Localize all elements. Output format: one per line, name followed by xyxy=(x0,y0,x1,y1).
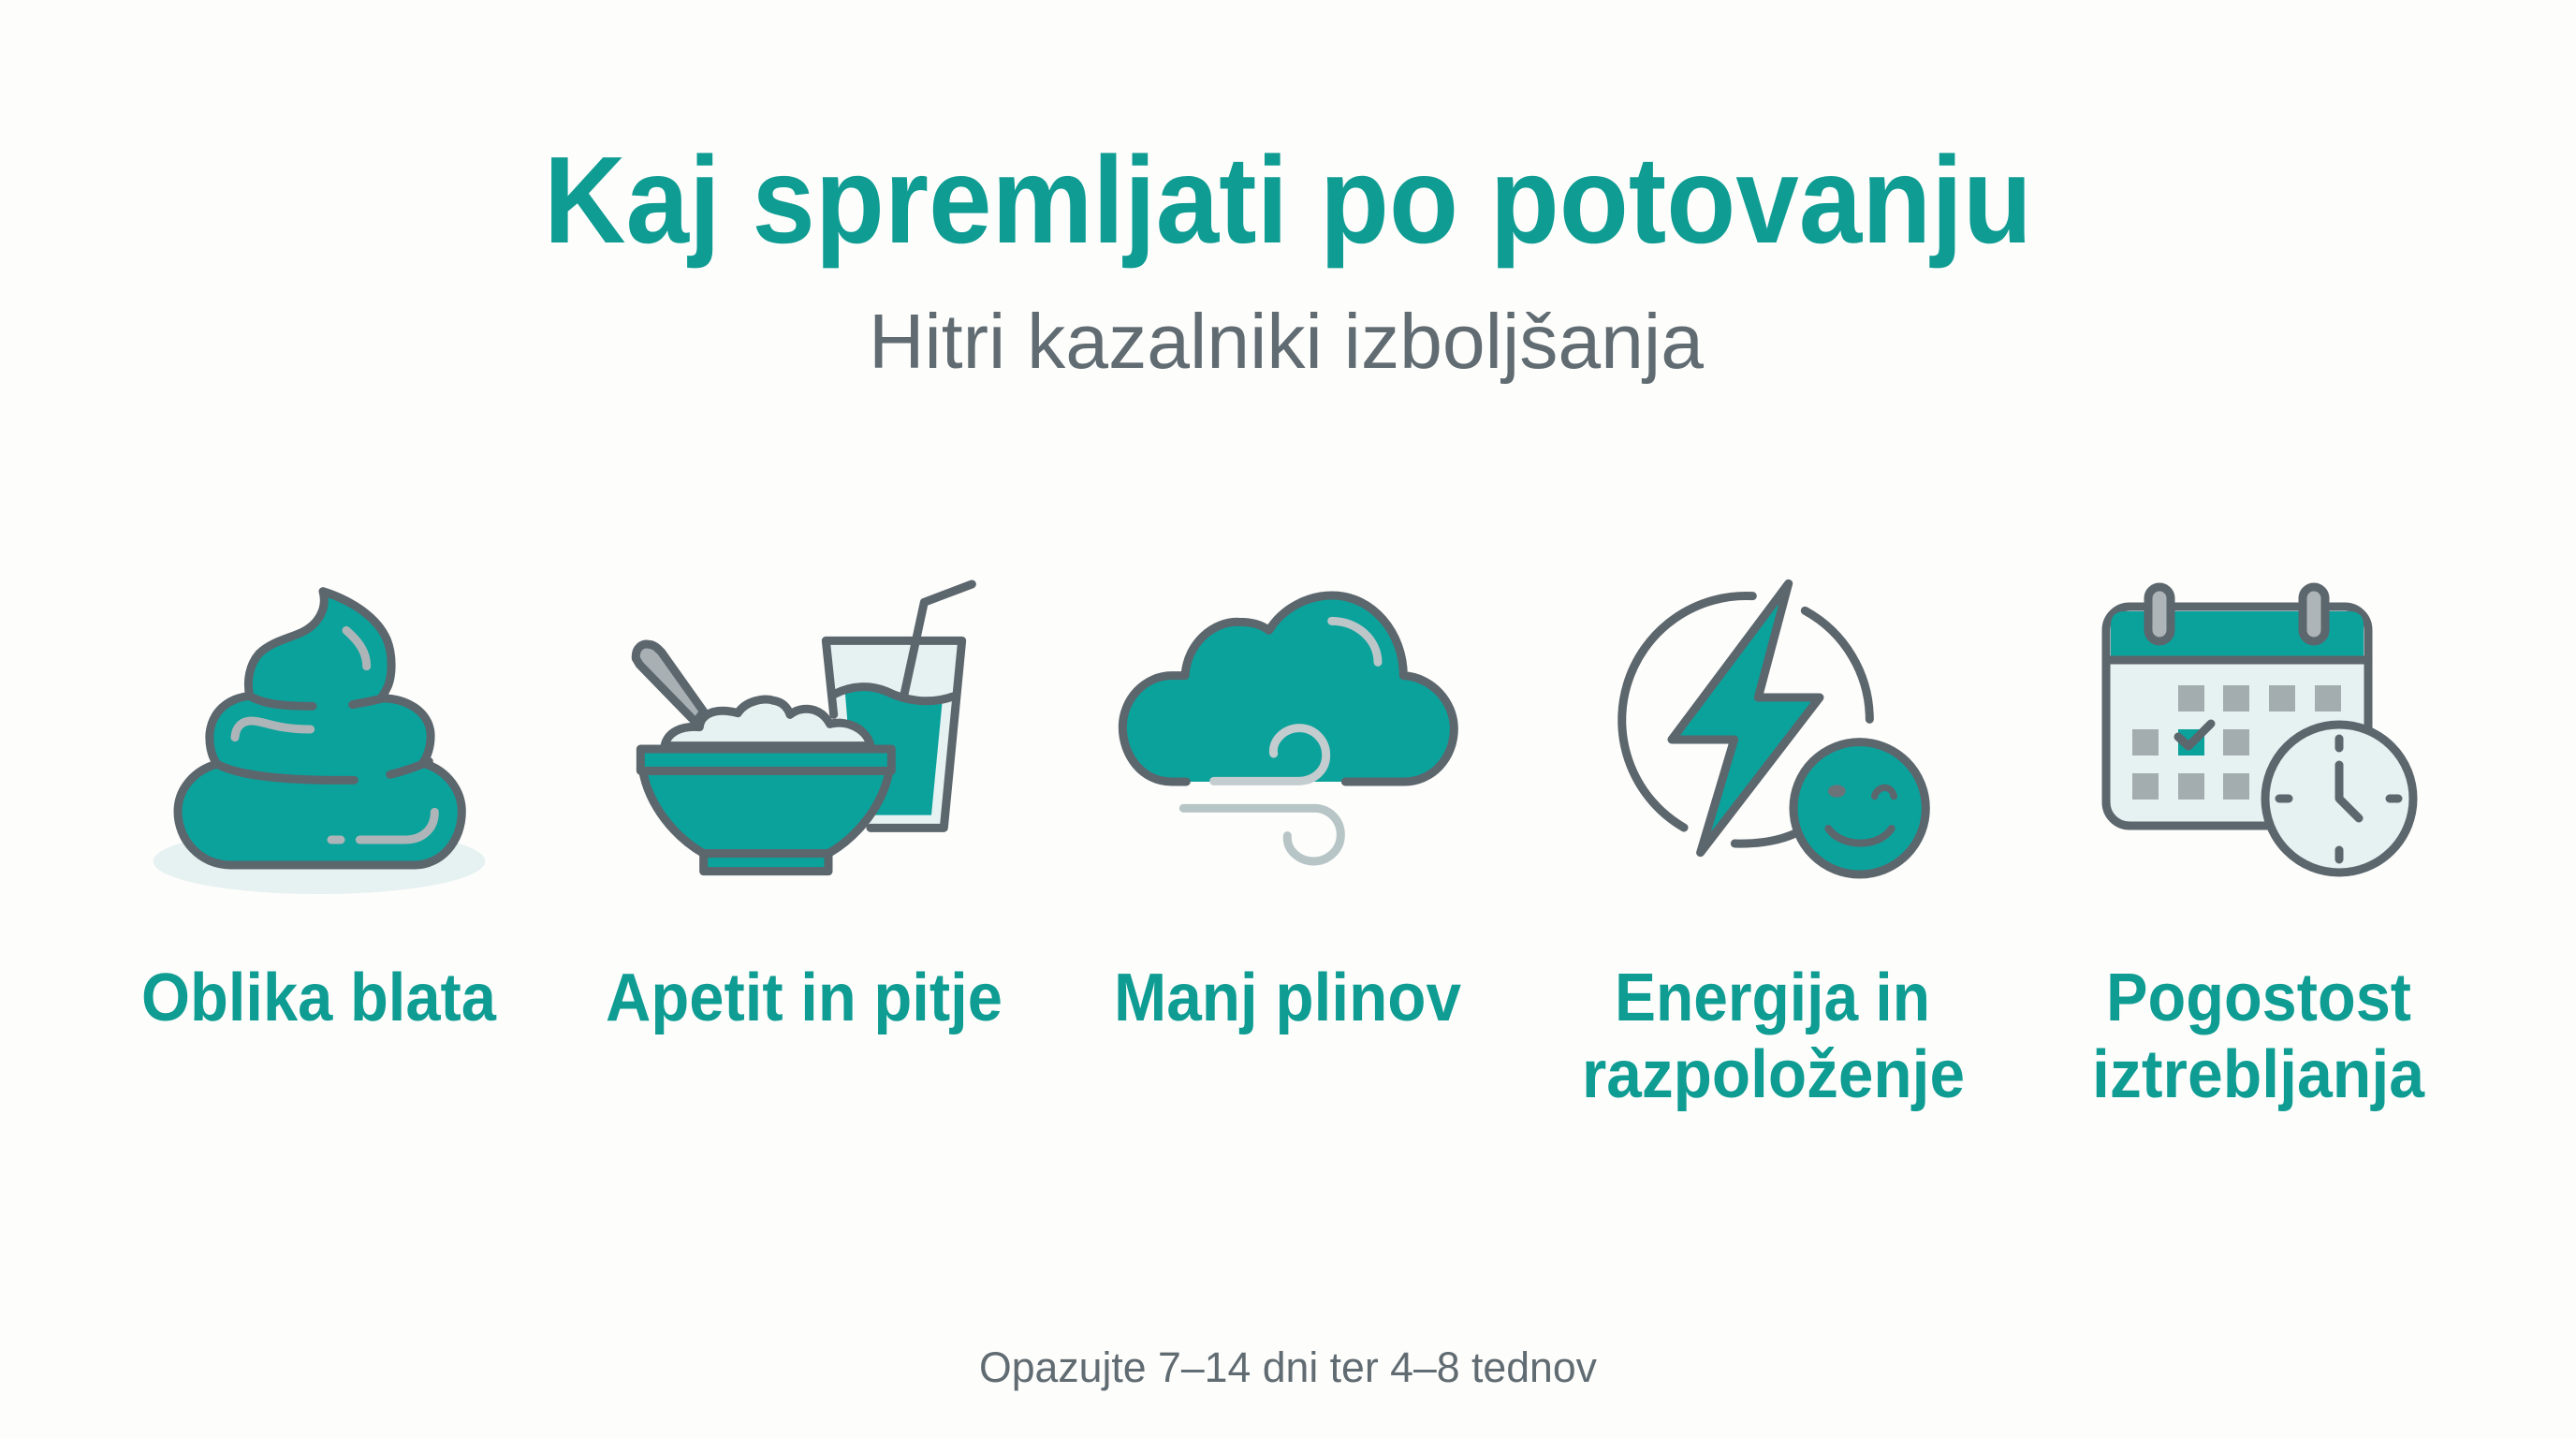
label: less gas: Manj plinov xyxy=(1114,961,1461,1035)
label: bowel frequency xyxy=(2092,961,2425,1112)
label: energy and mood xyxy=(1582,961,1965,1112)
icon: energy bolt and smiley xyxy=(1622,583,1925,874)
icon: calendar and clock xyxy=(2106,587,2413,873)
label: energy and mood: razpoloženje xyxy=(1582,1037,1965,1112)
label: bowel frequency: Pogostost xyxy=(2106,961,2411,1035)
icon: stool shape xyxy=(154,592,485,894)
title: Kaj spremljati po potovanju xyxy=(544,131,2032,269)
footer note: Opazujte 7–14 dni ter 4–8 tednov xyxy=(979,1343,1597,1391)
subtitle: Hitri kazalniki izboljšanja xyxy=(869,298,1705,385)
icon: cloud with wind xyxy=(1122,595,1454,861)
label: energy and mood: Energija in xyxy=(1615,961,1930,1035)
label: appetite and drinking: Apetit in pitje xyxy=(606,961,1003,1035)
icon: bowl and drink xyxy=(636,584,972,872)
label: bowel frequency: iztrebljanja xyxy=(2092,1037,2425,1112)
label: stool shape: Oblika blata xyxy=(141,961,497,1035)
